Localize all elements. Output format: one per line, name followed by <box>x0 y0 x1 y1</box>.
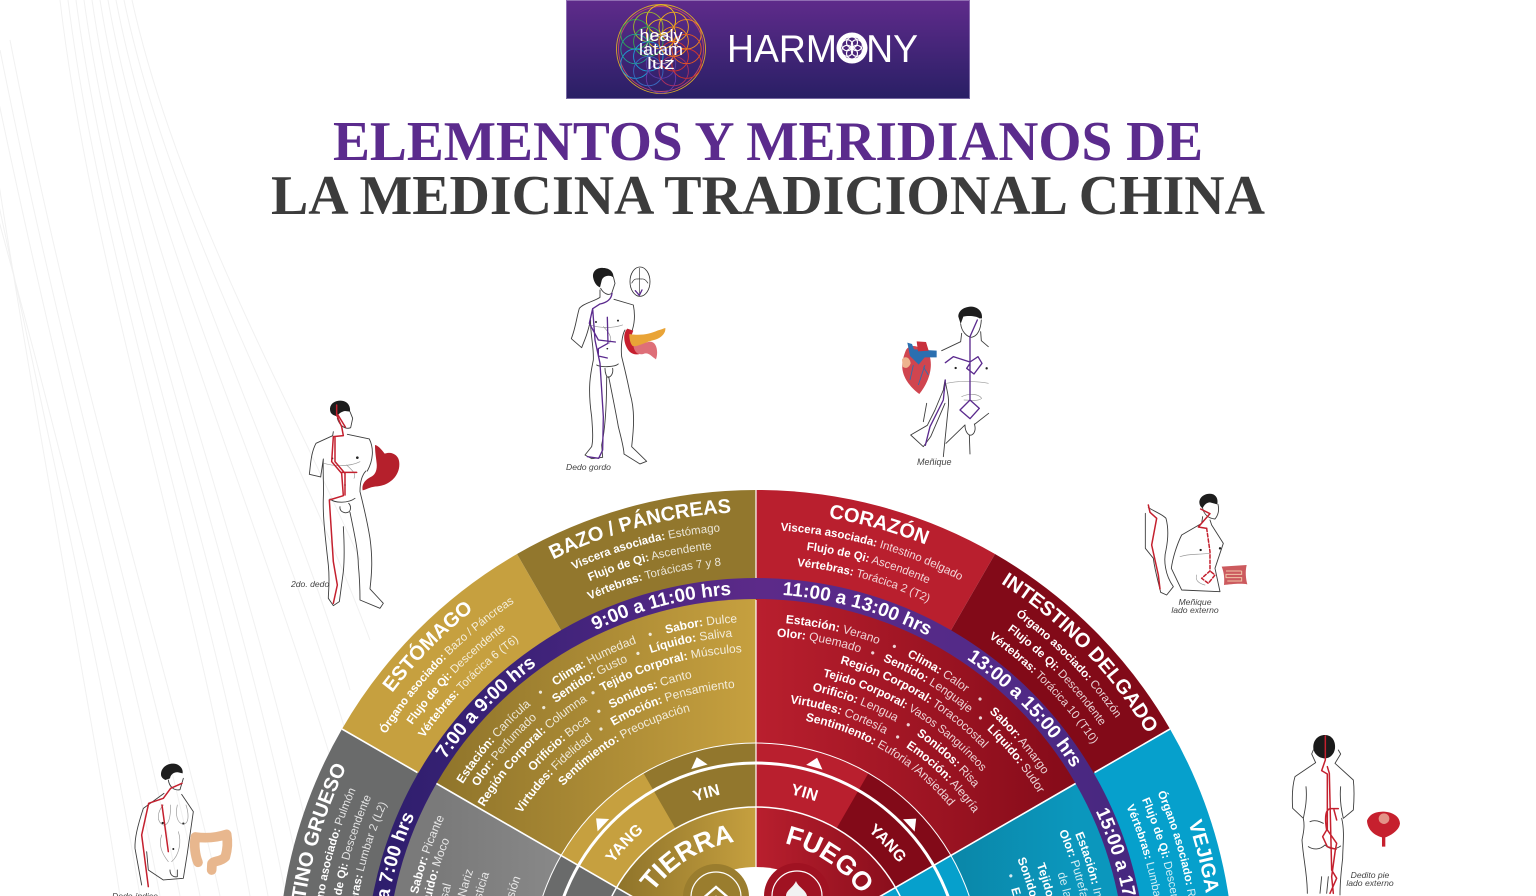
labels: yin yang: YIN <box>789 782 820 805</box>
text: tierra attributes: Sentimiento: Preocupación <box>558 705 690 785</box>
time labels <box>378 582 1136 896</box>
figure: intestino delgado meridian <box>1145 494 1247 615</box>
panel: fuego inner sector <box>756 599 1076 896</box>
core: tierra <box>617 807 756 896</box>
heading: vejiga: VEJIGA <box>1190 818 1218 894</box>
labels: yin yang: YANG <box>865 821 909 866</box>
time labels: 7:00 a 9:00 hrs <box>435 658 535 758</box>
five-elements wheel <box>283 490 1229 896</box>
panel: intestino grueso sector <box>278 729 756 896</box>
caption <box>1346 870 1394 888</box>
ring: fuego yang <box>756 773 951 896</box>
logo wordmark: luz <box>647 54 675 73</box>
text: intestino delgado details: Órgano asociado: Corazón <box>1017 610 1120 718</box>
ring: tierra yang <box>561 773 756 896</box>
text: intestino delgado details <box>991 610 1120 744</box>
panel: bazo pancreas sector <box>517 490 756 896</box>
text: fuego attributes: Región Corporal: Toracocostal <box>840 656 989 748</box>
text: intestino grueso details <box>318 788 388 896</box>
caption: lado externo <box>1171 605 1219 615</box>
time labels: 11:00 a 13:00 hrs <box>784 582 930 634</box>
text: bazo pancreas details: Viscera asociada: Estómago <box>570 526 720 568</box>
heading: bazo pancreas: BAZO / PÁNCREAS <box>548 499 730 559</box>
caption: Meñique <box>917 457 952 467</box>
text: intestino delgado details: Vértebras: Torácica 10 (T10) <box>991 631 1098 744</box>
text: vejiga details <box>1127 791 1196 896</box>
text: estomago details: Órgano asociado: Bazo / Páncreas <box>380 598 514 732</box>
text: fuego attributes: Virtudes: Cortesía • Emoción: Alegría <box>790 692 983 815</box>
text: fuego attributes: Estación: Verano • Clima: Calor • Sabor: Amargo <box>786 615 1048 774</box>
text: corazon details: Vértebras: Torácica 2 (T2) <box>798 558 930 604</box>
text: estomago details: Vértebras: Torácica 6 (T6) <box>418 636 518 736</box>
labels: yin yang <box>604 784 906 862</box>
panel: intestino delgado sector <box>756 554 1170 896</box>
title: ELEMENTOS Y MERIDIANOS DE <box>333 111 1203 173</box>
HARMONY wordmark: HARMONY <box>727 28 918 71</box>
core: metal <box>595 888 756 896</box>
title <box>271 111 1266 227</box>
figure: corazon meridian <box>902 307 989 467</box>
title: LA MEDICINA TRADICIONAL CHINA <box>271 165 1266 227</box>
panel: tierra inner sector <box>436 599 756 896</box>
white hub <box>655 867 857 896</box>
element name: tierra: TIERRA <box>634 818 736 896</box>
text: tierra attributes: Virtudes: Fidelidad • Emoción: Pensamiento <box>514 680 734 811</box>
time labels: 9:00 a 11:00 hrs <box>591 584 730 629</box>
labels: yin yang: YANG <box>603 821 647 866</box>
caption: Dedito pie <box>1351 870 1390 880</box>
icon: flower of life logo <box>616 4 706 94</box>
text: intestino delgado details: Flujo de Qi: Descendente <box>1008 624 1104 725</box>
figure: bazo / pancreas meridian <box>566 267 665 472</box>
caption: Dedo gordo <box>566 462 611 472</box>
time labels: 13:00 a 15:00 hrs <box>968 650 1080 767</box>
heading: corazon: CORAZÓN <box>830 505 930 544</box>
text: fuego attributes: Orificio: Lengua • Sonidos: Risa <box>812 680 983 790</box>
panel: agua inner sector <box>756 784 1125 896</box>
text: tierra attributes: Olor: Perfumado • Sentido: Gusto • Líquido: Saliva <box>472 629 732 785</box>
caption <box>1171 597 1219 615</box>
text: bazo pancreas details: Vértebras: Torácicas 7 y 8 <box>586 558 720 599</box>
ring: tierra yin <box>644 743 756 896</box>
ring: agua yin yang <box>756 856 981 896</box>
header banner <box>566 0 970 99</box>
logo wordmark: latam <box>639 40 683 59</box>
text: metal attributes: Sabor: Picante <box>407 812 447 895</box>
core: fuego <box>756 807 895 896</box>
caption: Meñique <box>1179 597 1212 607</box>
figure: estomago meridian <box>290 401 399 608</box>
caption: lado externo <box>1346 878 1394 888</box>
text: corazon details: Flujo de Qi: Ascendente <box>807 542 930 583</box>
text: bazo pancreas details <box>570 526 720 599</box>
text: bazo pancreas details: Flujo de Qi: Ascendente <box>587 542 711 581</box>
text: tierra attributes: Orificio: Boca • Sonidos: Canto <box>528 672 692 770</box>
panel: corazon sector <box>756 490 995 896</box>
text: fuego attributes: Tejido Corporal: Vasos Sanguíneos <box>824 668 986 771</box>
core: agua <box>756 888 917 896</box>
ring: metal yin yang <box>531 856 756 896</box>
purple time band <box>366 578 1146 896</box>
panel: vejiga sector <box>756 729 1234 896</box>
heading: estomago: ESTÓMAGO <box>382 602 470 692</box>
labels: yin yang: YIN <box>691 782 722 806</box>
text: tierra attributes: Región Corporal: Columna • Tejido Corporal: Músculos <box>478 644 742 806</box>
text: fuego attributes: Olor: Quemado • Sentido: Lenguaje • Líquido: Sudor <box>778 628 1044 792</box>
text: tierra attributes: Estación: Canícula • Clima: Humedad • Sabor: Dulce <box>456 614 737 784</box>
triangles: yin yang markers <box>590 755 922 832</box>
panel: estomago sector <box>342 554 756 896</box>
text: agua attributes <box>1009 830 1102 896</box>
text: fuego attributes: Sentimiento: Euforia /Ansiedad <box>805 710 958 808</box>
logo wordmark: healy <box>640 26 683 45</box>
ring: fuego yin <box>756 743 868 896</box>
caption: 2do. dedo <box>290 579 329 589</box>
logo wordmark <box>639 26 683 73</box>
figure: intestino grueso meridian <box>112 764 227 896</box>
text: metal attributes <box>410 816 520 896</box>
heading: intestino delgado: INTESTINO DELGADO <box>1002 572 1156 731</box>
text: corazon details: Viscera asociada: Intestino delgado <box>781 522 962 580</box>
text: estomago details: Flujo de Qi: Descendente <box>406 626 505 724</box>
panel: metal inner sector <box>387 784 756 896</box>
icon: tierra badge <box>683 864 749 896</box>
icon: fuego badge <box>764 863 830 896</box>
figure: vejiga meridian <box>1292 735 1400 895</box>
